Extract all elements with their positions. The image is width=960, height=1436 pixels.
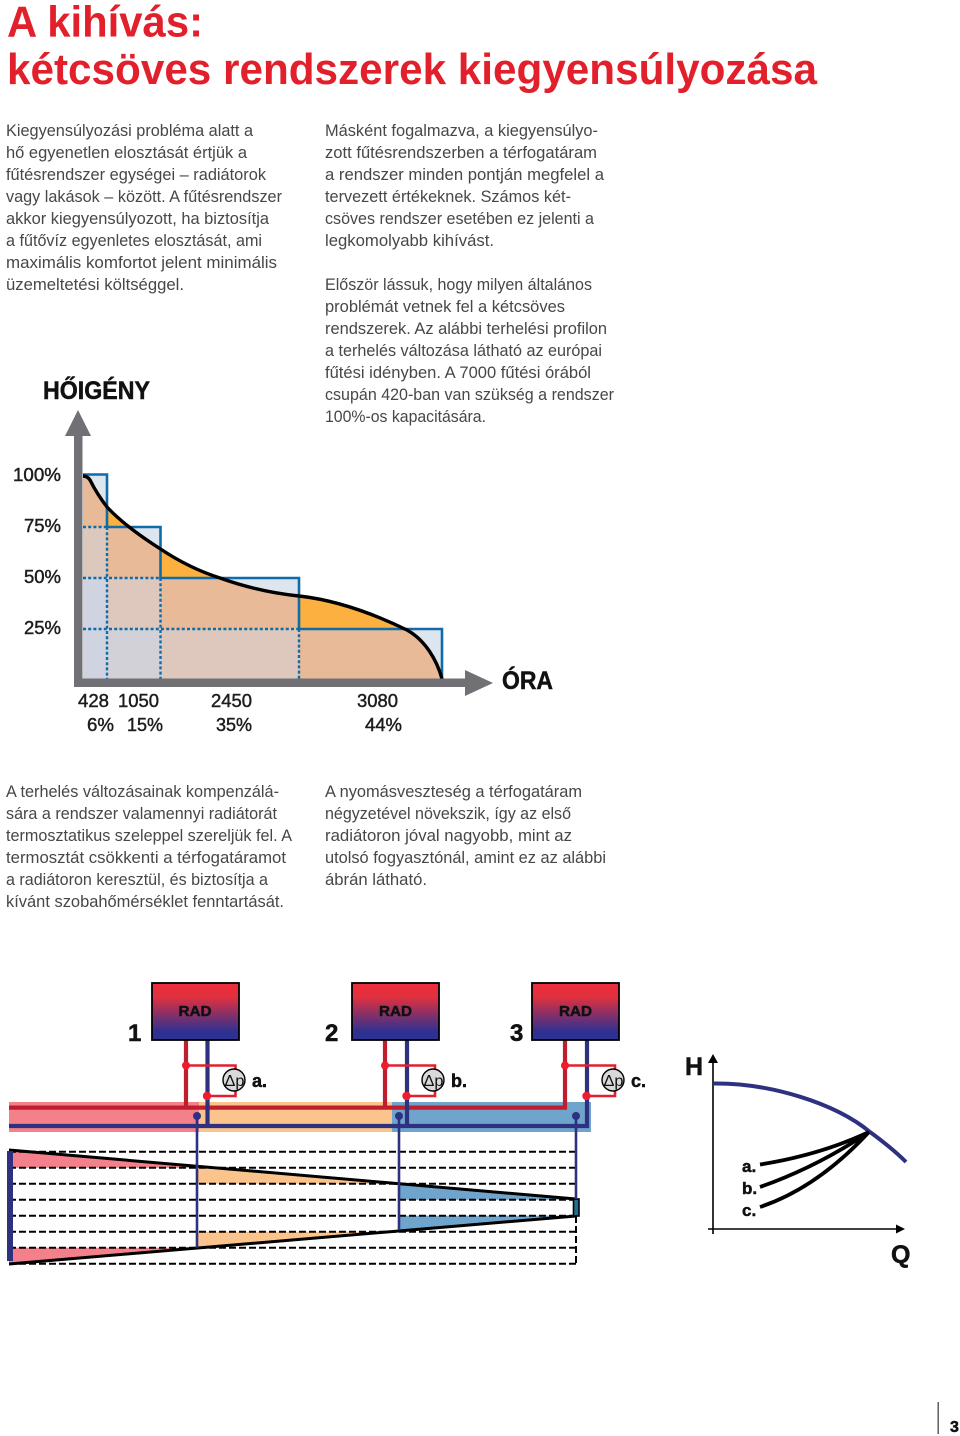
text block: intro right [325, 121, 614, 426]
main pipes [9, 1108, 589, 1126]
dashed grid [9, 1152, 576, 1264]
wedge outlines [9, 1150, 576, 1264]
text block: intro right: problémát vetnek fel a kétcsöves [325, 297, 565, 316]
hour labels: 2450 [211, 691, 252, 711]
text block: intro left: fűtésrendszer egységei – radiátorok [6, 165, 266, 184]
percent labels: 50% [24, 567, 61, 587]
chart area fills [83, 475, 442, 679]
text block: intro left: Kiegyensúlyozási probléma alatt a [6, 121, 254, 140]
text block: lower left: termosztatikus szeleppel szereljük fel. A [6, 826, 293, 845]
text block: intro right: rendszerek. Az alábbi terhelési profilon [325, 319, 607, 338]
page number: 3 [950, 1419, 959, 1436]
text block: intro left: akkor kiegyensúlyozott, ha biztosítja [6, 209, 270, 228]
percent labels: 25% [24, 618, 61, 638]
dotted grid [83, 527, 299, 679]
load profile chart [13, 410, 493, 735]
radiator 2: RAD [379, 1003, 412, 1020]
text block: intro right: tervezett értékeknek. Számos két- [325, 187, 571, 206]
radiator 2: b. [451, 1071, 467, 1091]
step profile [83, 474, 442, 680]
text block: lower left: a radiátoron keresztül, és biztosítja a [6, 870, 269, 889]
axis and curve labels: b. [742, 1179, 757, 1198]
text block: lower left: sára a rendszer valamennyi radiátorát [6, 804, 277, 823]
arrow: H axis [708, 1054, 718, 1063]
radiator 1: Δp [224, 1073, 245, 1090]
text block: intro left: üzemeltetési költséggel. [6, 275, 184, 294]
text block: lower left [6, 782, 293, 911]
system curves [760, 1132, 869, 1207]
text block: lower right: utolsó fogyasztónál, amint ez az alábbi [325, 848, 606, 867]
text block: intro right: csupán 420-ban van szükség a rendszer [325, 385, 614, 404]
text block: intro left [6, 121, 282, 294]
text block: lower right: A nyomásveszteség a térfogatáram [325, 782, 582, 801]
text block: lower left: A terhelés változásainak kompenzálá- [6, 782, 279, 801]
axis and curve labels: a. [742, 1157, 756, 1176]
radiator 1: 1 [128, 1020, 141, 1047]
text block: intro right: fűtési idényben. A 7000 fűtési órából [325, 363, 591, 382]
radiator 3: Δp [604, 1073, 624, 1090]
radiator 1 [128, 983, 267, 1248]
text block: intro right: legkomolyabb kihívást. [325, 231, 494, 250]
right end block [574, 1199, 579, 1216]
radiator 3: RAD [559, 1003, 592, 1020]
text block: lower right: ábrán látható. [325, 870, 427, 889]
pump curve chart [685, 1053, 910, 1269]
hour labels: 6% [87, 715, 114, 735]
page number [938, 1402, 959, 1436]
heading: load axis: HŐIGÉNY [43, 376, 150, 405]
hour labels: 1050 [118, 691, 159, 711]
distribution band [9, 1102, 591, 1132]
hour labels: 44% [365, 715, 402, 735]
radiator 3: c. [631, 1071, 646, 1091]
text block: lower left: termosztát csökkenti a térfogatáramot [6, 848, 286, 867]
arrow: Q axis [896, 1224, 905, 1234]
two-pipe system diagram [7, 983, 646, 1264]
radiator 2: Δp [424, 1073, 444, 1090]
radiator 3: 3 [510, 1020, 523, 1047]
text block: lower right [325, 782, 606, 889]
text block: intro right: a rendszer minden pontján megfelel a [325, 165, 605, 184]
arrow: vertical axis [65, 410, 493, 696]
radiator 1: a. [252, 1071, 267, 1091]
text block: lower left: kívánt szobahőmérséklet fenntartását. [6, 892, 284, 911]
percent labels [13, 465, 61, 638]
pressure wedges [9, 1150, 576, 1264]
title: kétcsöves rendszerek kiegyensúlyozása [7, 45, 818, 94]
hour labels [78, 691, 402, 735]
axis and curve labels: Q [891, 1241, 910, 1269]
axes [708, 1063, 898, 1234]
text block: intro right: a terhelés változása látható az európai [325, 341, 602, 360]
axis and curve labels: H [685, 1053, 703, 1081]
radiator 1: RAD [178, 1003, 212, 1020]
text block: intro right: zott fűtésrendszerben a térfogatáram [325, 143, 597, 162]
radiator 2: 2 [325, 1020, 338, 1047]
axis and curve labels: c. [742, 1201, 756, 1220]
radiator 3 [510, 983, 646, 1199]
hour labels: 3080 [357, 691, 398, 711]
hour labels: 15% [127, 715, 163, 735]
heading: time axis: ÓRA [502, 665, 553, 695]
pump curve [714, 1083, 906, 1162]
hour labels: 428 [78, 691, 109, 711]
hour labels: 35% [216, 715, 252, 735]
text block: intro left: maximális komfortot jelent minimális [6, 253, 277, 272]
text block: intro right: Másként fogalmazva, a kiegyensúlyo- [325, 121, 598, 140]
text block: intro left: a fűtővíz egyenletes elosztását, ami [6, 231, 262, 250]
text block: lower right: radiátoron jóval nagyobb, mint az [325, 826, 572, 845]
percent labels: 75% [24, 516, 61, 536]
text block: intro right: 100%-os kapacitására. [325, 407, 486, 426]
left end bar [7, 1151, 13, 1261]
axis and curve labels [685, 1053, 910, 1269]
load curve [83, 476, 442, 679]
percent labels: 100% [13, 465, 61, 485]
radiator 2 [325, 983, 467, 1230]
title [7, 0, 818, 94]
text block: lower right: négyzetével növekszik, így az első [325, 804, 571, 823]
text block: intro right: csöves rendszer esetében ez jelenti a [325, 209, 595, 228]
text block: intro left: hő egyenetlen elosztását értjük a [6, 143, 248, 162]
text block: intro right: Először lássuk, hogy milyen általános [325, 275, 592, 294]
text block: intro left: vagy lakások – között. A fűtésrendszer [6, 187, 282, 206]
